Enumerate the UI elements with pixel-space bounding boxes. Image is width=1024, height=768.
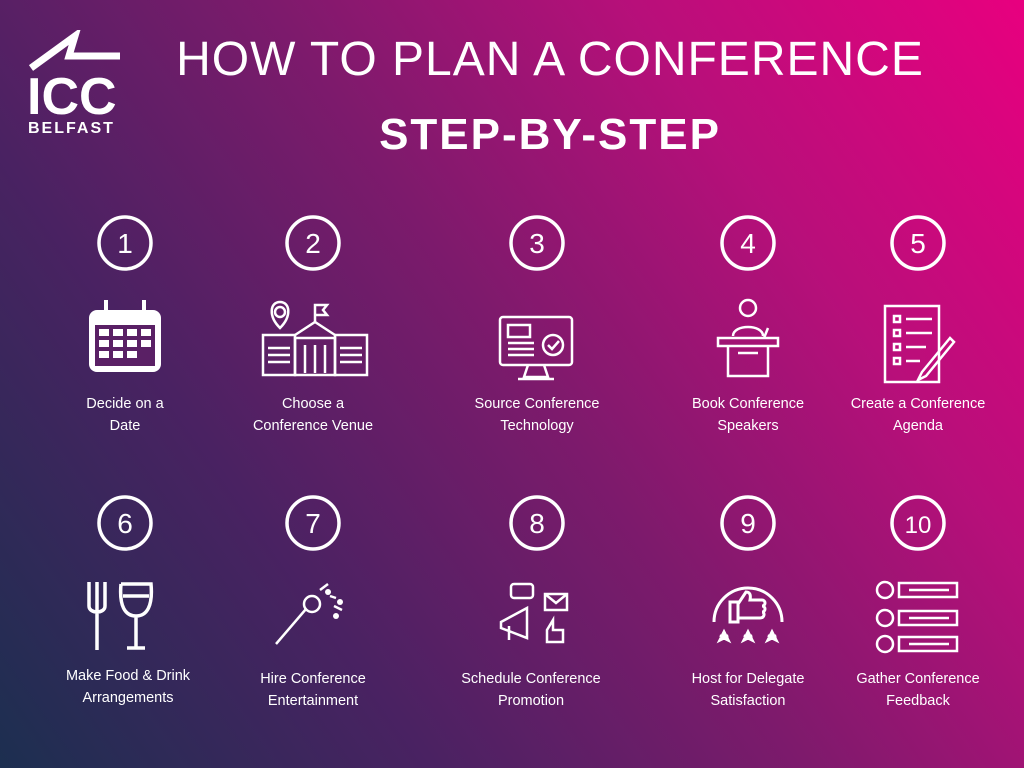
text: Speakers: [717, 418, 779, 434]
labels row 2: Make Food & Drink: [66, 668, 190, 684]
text: Entertainment: [268, 693, 358, 709]
text: Hire Conference: [260, 671, 366, 687]
step circles: 10: [905, 512, 931, 539]
step circles: 3: [529, 228, 545, 259]
icon: speaker: [716, 298, 780, 378]
step circles: 6: [117, 508, 133, 539]
text: Schedule Conference: [461, 671, 601, 687]
text: Satisfaction: [711, 693, 785, 709]
icon: cutlery & glass: [87, 582, 154, 650]
text: Technology: [500, 418, 574, 434]
logo: [27, 30, 120, 137]
text: Conference Venue: [253, 418, 373, 434]
text: Book Conference: [692, 396, 804, 412]
labels row 1: Date: [110, 418, 140, 434]
labels row 1: Decide on a: [86, 396, 164, 412]
icon: thumbs up rating: [712, 586, 784, 644]
text: Gather Conference: [856, 671, 980, 687]
step circles: 2: [305, 228, 321, 259]
text: Choose a: [282, 396, 344, 412]
labels row 1: [86, 396, 164, 434]
icon: monitor: [498, 316, 574, 380]
title: HOW TO PLAN A CONFERENCE: [176, 33, 924, 86]
labels row 2: Arrangements: [82, 690, 174, 706]
text: Feedback: [886, 693, 950, 709]
step circles: 5: [910, 228, 926, 259]
icon: microphone: [275, 583, 343, 645]
labels row 2: [66, 668, 190, 706]
text: Create a Conference: [851, 396, 985, 412]
icon: feedback: [876, 580, 958, 654]
icon: agenda: [884, 304, 956, 384]
step circles: 8: [529, 508, 545, 539]
icon: calendar: [89, 300, 161, 372]
text: Host for Delegate: [692, 671, 804, 687]
text: Agenda: [893, 418, 943, 434]
subtitle: STEP-BY-STEP: [379, 110, 721, 159]
step circles: 1: [117, 228, 133, 259]
text: Promotion: [498, 693, 564, 709]
text: Source Conference: [475, 396, 599, 412]
step circles: 4: [740, 228, 756, 259]
icon: venue: [262, 300, 368, 376]
step circles: 7: [305, 508, 321, 539]
step circles: 9: [740, 508, 756, 539]
icon: promotion: [500, 582, 568, 644]
logo: BELFAST: [28, 120, 115, 137]
